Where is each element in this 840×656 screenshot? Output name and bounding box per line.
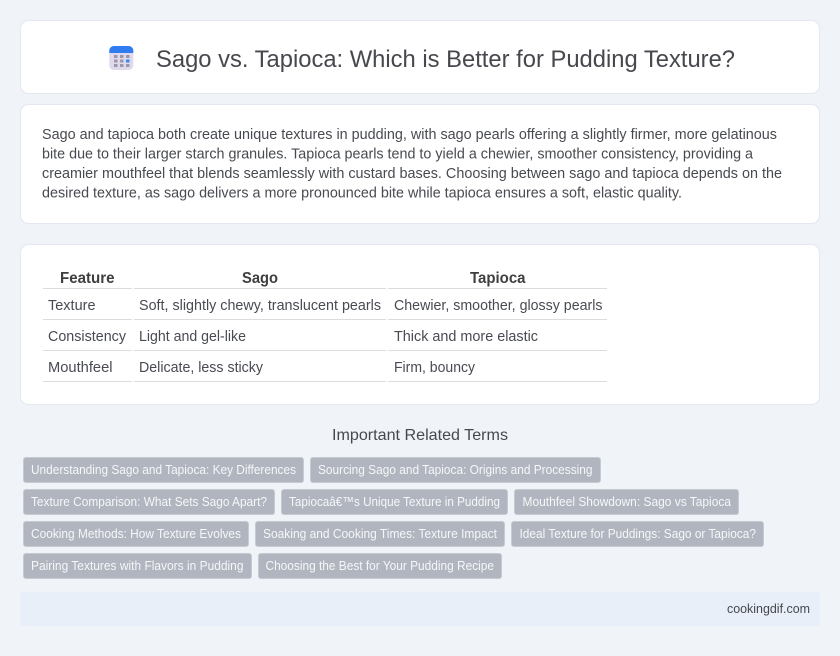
table header row: Sago — [242, 270, 278, 287]
table header row: Feature — [60, 270, 115, 287]
tag — [24, 522, 248, 546]
table row: mouthfeel — [43, 360, 607, 382]
tag — [310, 458, 600, 482]
tag — [24, 490, 274, 514]
tag: Texture Comparison: What Sets Sago Apart? — [31, 494, 267, 509]
table row: mouthfeel: Firm, bouncy — [394, 360, 476, 376]
tag list: related terms — [24, 458, 764, 578]
tag — [258, 554, 502, 578]
panel: comparison table — [20, 244, 820, 404]
heading: important related terms: Important Related Terms — [332, 427, 508, 444]
tag — [24, 458, 304, 482]
tag: Mouthfeel Showdown: Sago vs Tapioca — [522, 494, 732, 509]
tag — [256, 522, 504, 546]
text block: introduction: creamier mouthfeel that blends seamlessly with custard bases. Choosing between sago and tapioca depends on the — [42, 166, 782, 182]
table row: consistency — [43, 329, 607, 351]
text block: introduction: desired texture, as sago delivers a more pronounced bite while tapioca ensures a soft, elastic quality. — [42, 186, 682, 202]
tag: Pairing Textures with Flavors in Pudding — [31, 558, 244, 573]
panel: introduction text — [20, 104, 820, 224]
table row: consistency: Consistency — [48, 329, 127, 345]
table row: mouthfeel: Delicate, less sticky — [139, 360, 264, 376]
tag — [514, 490, 738, 514]
table row: consistency: Light and gel-like — [139, 329, 246, 345]
tag — [282, 490, 508, 514]
tag: Sourcing Sago and Tapioca: Origins and Processing — [318, 462, 592, 477]
table row: texture: Texture — [48, 298, 96, 314]
tag: Soaking and Cooking Times: Texture Impact — [263, 526, 497, 541]
table row: mouthfeel: Mouthfeel — [48, 360, 112, 376]
tag — [512, 522, 764, 546]
title: Sago vs. Tapioca: Which is Better for Pudding Texture? — [156, 46, 735, 73]
panel: title header — [20, 20, 820, 94]
tag: Choosing the Best for Your Pudding Recipe — [266, 558, 494, 573]
table header row — [43, 270, 607, 289]
table header row: Tapioca — [470, 270, 526, 287]
tag: Cooking Methods: How Texture Evolves — [31, 526, 241, 541]
tag: Understanding Sago and Tapioca: Key Differences — [31, 462, 296, 477]
text block: introduction: Sago and tapioca both create unique textures in pudding, with sago pearls offering a slightly firmer, more gelatinous — [42, 127, 777, 143]
table row: texture: Chewier, smoother, glossy pearls — [394, 298, 602, 314]
table row: texture — [43, 298, 607, 320]
text block: introduction: bite due to their larger starch granules. Tapioca pearls tend to yield a chewier, smoother consistency, providing a — [42, 146, 754, 162]
footer source text: cookingdif.com — [727, 601, 810, 616]
table row: texture: Soft, slightly chewy, translucent pearls — [139, 298, 381, 314]
tag: Ideal Texture for Puddings: Sago or Tapioca? — [520, 526, 756, 541]
tag — [24, 554, 252, 578]
footer bar — [20, 592, 820, 626]
icon: calendar — [109, 46, 133, 70]
text block: introduction — [42, 127, 782, 202]
tag: Tapiocaâ€™s Unique Texture in Pudding — [289, 494, 500, 509]
table row: consistency: Thick and more elastic — [394, 329, 538, 345]
